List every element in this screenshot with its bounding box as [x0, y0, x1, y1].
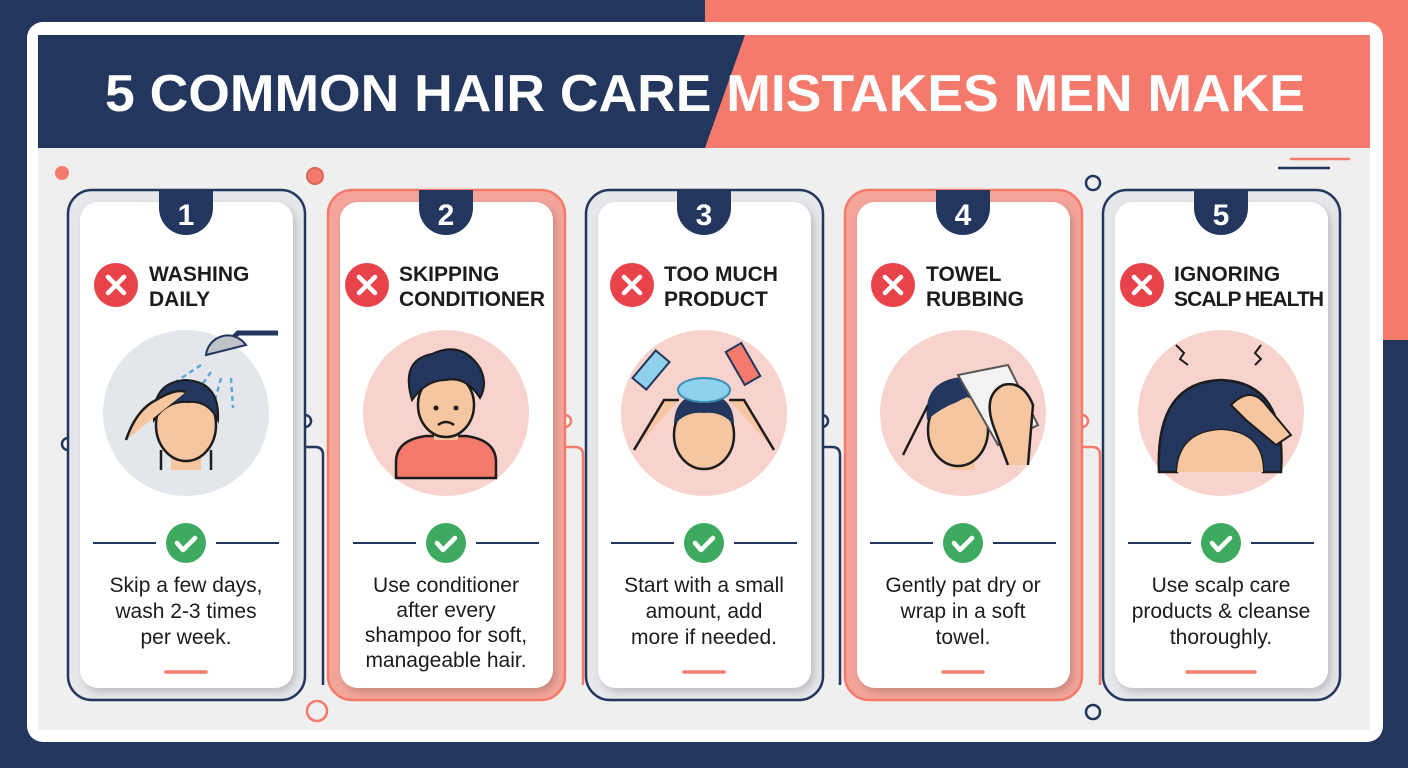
solution: after every [396, 599, 496, 622]
solution: towel. [936, 626, 990, 649]
solution: wrap in a soft [900, 600, 1026, 623]
solution: thoroughly. [1170, 626, 1272, 649]
title banner [38, 35, 1370, 148]
decorations [55, 159, 1350, 721]
card 2 [328, 190, 565, 700]
solution [611, 523, 797, 672]
mistake heading: DAILY [149, 288, 210, 311]
mistake heading: SKIPPING [399, 263, 499, 286]
mistake heading: RUBBING [926, 288, 1024, 311]
number tab: 4 [955, 199, 972, 232]
number tab [936, 190, 990, 235]
solution: Gently pat dry or [885, 574, 1041, 597]
mistake heading: SCALP HEALTH [1174, 288, 1324, 311]
connectors [62, 415, 1100, 685]
solution [353, 523, 539, 672]
number tab [1194, 190, 1248, 235]
solution: Use conditioner [373, 574, 519, 597]
solution: more if needed. [631, 626, 777, 649]
number tab: 1 [178, 199, 194, 232]
number tab: 2 [438, 199, 454, 232]
card 3 [586, 190, 823, 700]
mistake heading: WASHING [149, 263, 249, 286]
solution: per week. [140, 626, 232, 649]
illustration: towel rubbing [880, 330, 1046, 496]
solution: manageable hair. [365, 649, 527, 672]
mistake heading: PRODUCT [664, 288, 768, 311]
mistake heading [871, 263, 1024, 311]
mistake heading: TOO MUCH [664, 263, 778, 286]
solution [93, 523, 279, 672]
solution: Skip a few days, [110, 574, 262, 597]
solution: products & cleanse [1132, 600, 1310, 623]
solution: Use scalp care [1152, 574, 1290, 597]
mistake heading: CONDITIONER [399, 288, 545, 311]
mistake heading [345, 263, 545, 311]
card 4 [845, 190, 1082, 700]
number tab: 3 [696, 199, 712, 232]
solution [870, 523, 1056, 672]
solution: wash 2-3 times [114, 600, 257, 623]
illustration: product overload [621, 330, 787, 496]
solution [1128, 523, 1314, 672]
number tab: 5 [1213, 199, 1229, 232]
mistake heading [94, 263, 249, 311]
number tab [677, 190, 731, 235]
mistake heading: IGNORING [1174, 263, 1280, 286]
mistake heading: TOWEL [926, 263, 1002, 286]
solution: shampoo for soft, [365, 624, 527, 647]
number tab [159, 190, 213, 235]
illustration: shower [103, 330, 278, 496]
number tab [419, 190, 473, 235]
solution: Start with a small [624, 574, 784, 597]
illustration: frustrated man [363, 330, 529, 496]
illustration: itchy scalp [1138, 330, 1304, 496]
mistake heading [610, 263, 778, 311]
title banner: 5 COMMON HAIR CARE MISTAKES MEN MAKE [105, 65, 1305, 123]
solution: amount, add [646, 600, 762, 623]
mistake heading [1120, 263, 1324, 311]
card 1 [68, 190, 305, 700]
card 5 [1103, 190, 1340, 700]
